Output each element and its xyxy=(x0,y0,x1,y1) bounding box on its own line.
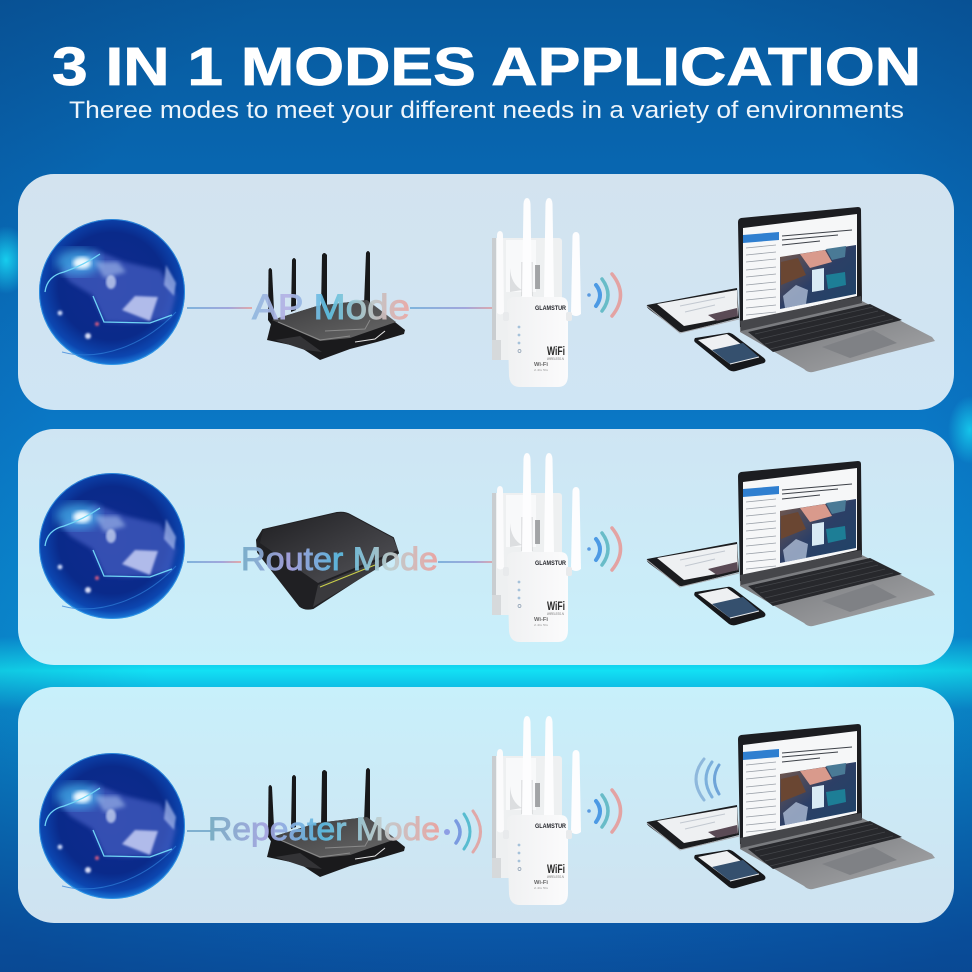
label: Repeater Mode: Repeater Mode xyxy=(208,811,440,847)
connection line: AP mode xyxy=(187,307,495,309)
subtitle: Theree modes to meet your different needs in a variety of environments xyxy=(69,97,904,124)
panel: AP mode xyxy=(18,174,954,410)
icon: globe xyxy=(39,473,185,619)
connection line: Repeater mode xyxy=(187,830,211,832)
icon: router box xyxy=(257,513,398,609)
icon: router xyxy=(267,768,405,877)
icon: signal waves xyxy=(587,790,620,832)
connection line: Router mode xyxy=(187,561,495,563)
icon: laptop, tablet and phone xyxy=(647,207,935,372)
icon: signal waves xyxy=(587,528,620,570)
label: Router Mode: Router Mode xyxy=(241,541,438,577)
icon: wifi extender xyxy=(492,198,581,387)
label: AP Mode: AP Mode xyxy=(252,288,410,327)
icon: signal waves from router xyxy=(444,811,480,852)
icon: signal waves xyxy=(587,274,620,316)
icon: globe xyxy=(39,753,185,899)
panel: Repeater mode xyxy=(18,687,954,923)
icon: laptop, tablet and phone xyxy=(647,461,935,626)
panel: Router mode xyxy=(18,429,954,665)
icon: signal waves to laptop xyxy=(696,759,719,800)
icon: wifi extender xyxy=(492,716,581,905)
title: 3 IN 1 MODES APPLICATION xyxy=(52,37,921,97)
icon: router xyxy=(267,251,405,360)
icon: laptop, tablet and phone xyxy=(647,724,935,889)
icon: globe xyxy=(39,219,185,365)
icon: wifi extender xyxy=(492,453,581,642)
